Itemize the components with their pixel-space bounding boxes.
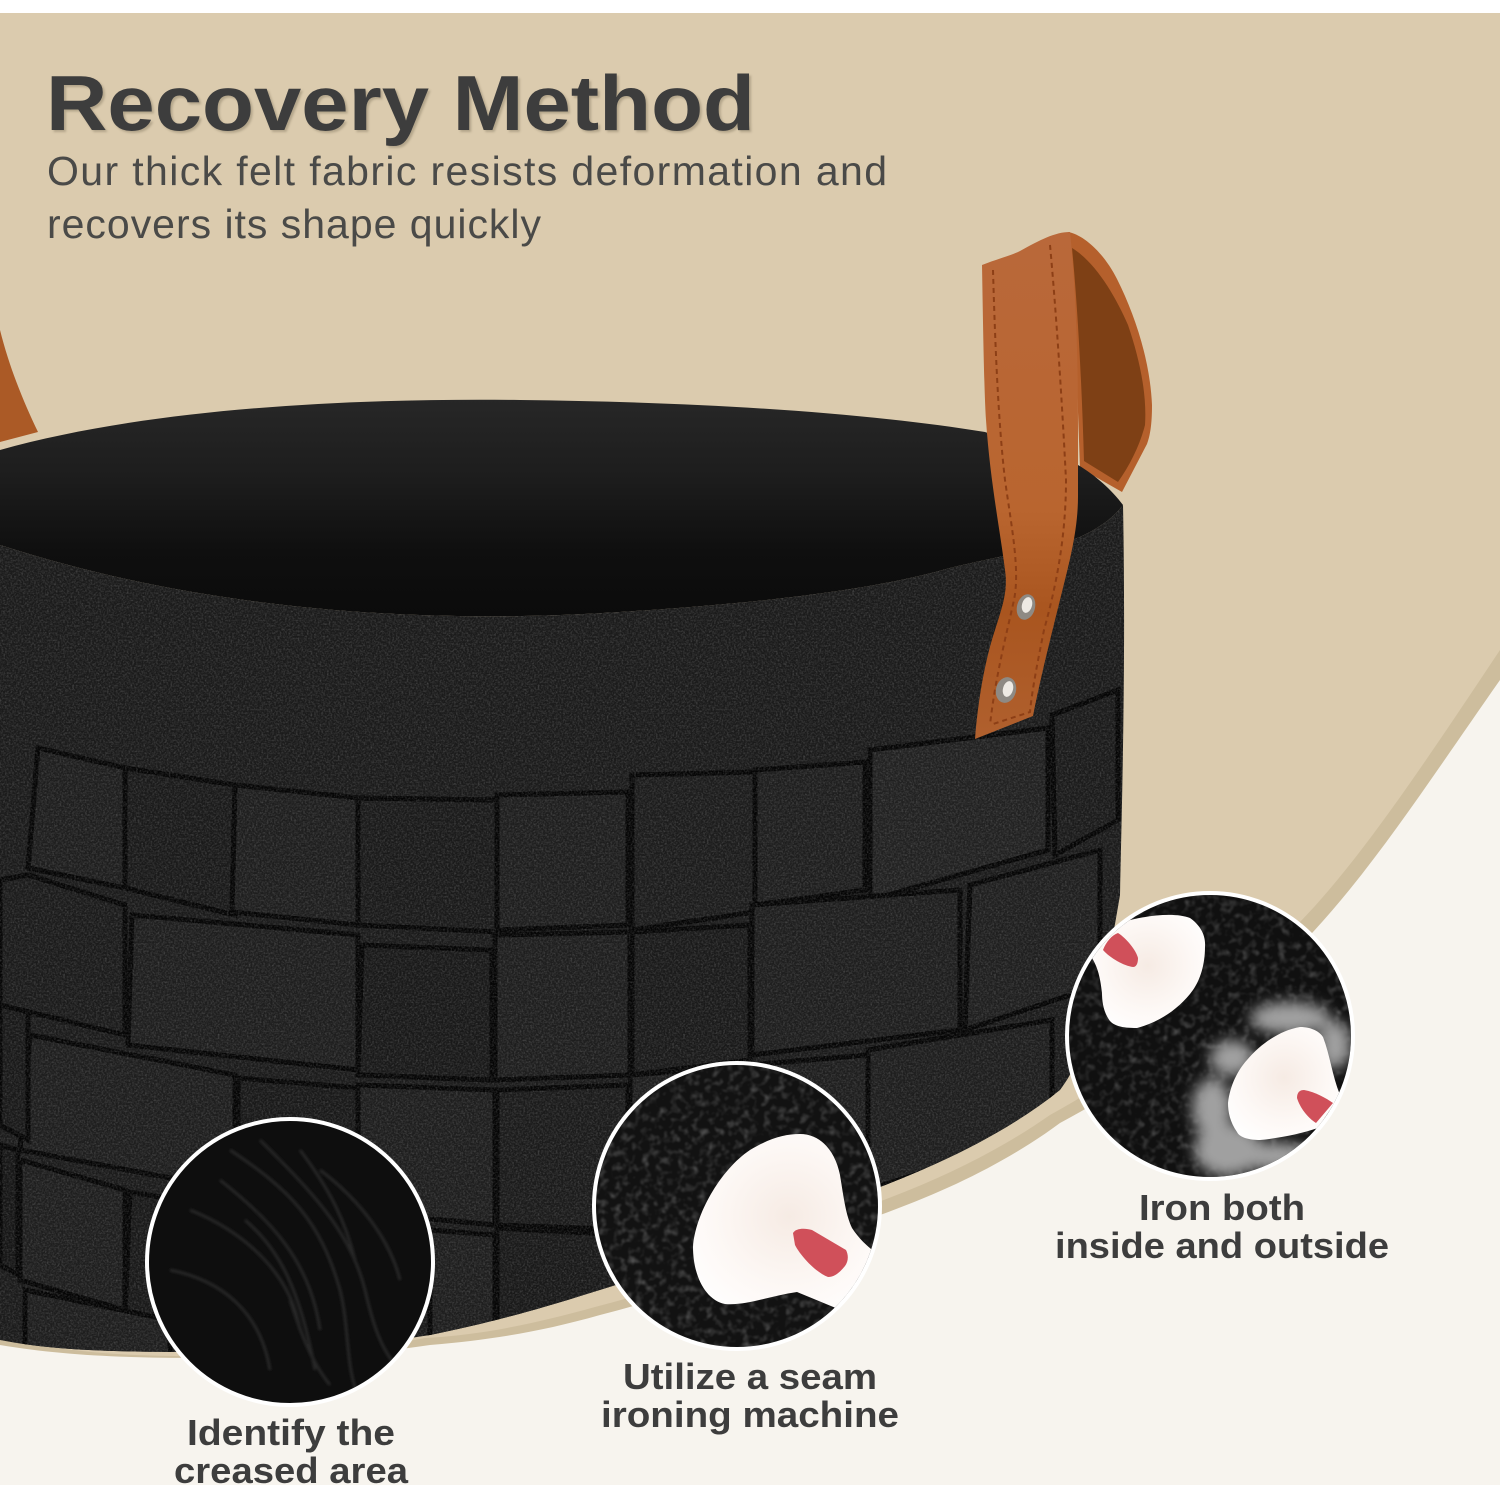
step 2: utilize a seam ironing machine xyxy=(590,1060,899,1435)
step 3: iron both inside and outside xyxy=(1055,890,1389,1266)
handle stitching xyxy=(990,245,1066,725)
circle photo: iron on felt xyxy=(590,1060,890,1360)
weave blocks xyxy=(0,690,1118,1360)
rivet bottom xyxy=(993,675,1019,705)
basket outer wall xyxy=(0,480,1130,1360)
basket interior xyxy=(0,400,1123,616)
caption xyxy=(174,1412,409,1491)
circle photo: irons and steam xyxy=(1060,890,1360,1190)
subtitle xyxy=(47,148,887,247)
right handle back xyxy=(1068,232,1152,492)
caption: Identify the xyxy=(187,1412,395,1453)
subtitle: recovers its shape quickly xyxy=(47,201,542,247)
title: Recovery Method xyxy=(46,59,755,147)
step 1: identify the creased area xyxy=(147,1119,433,1491)
caption xyxy=(1055,1187,1389,1266)
subtitle: Our thick felt fabric resists deformation and xyxy=(47,148,887,194)
caption: Iron both xyxy=(1139,1187,1305,1228)
felt basket with leather handles xyxy=(0,232,1152,1360)
caption: creased area xyxy=(174,1450,409,1491)
caption: ironing machine xyxy=(601,1394,899,1435)
rivet top xyxy=(1014,592,1038,622)
caption: inside and outside xyxy=(1055,1225,1389,1266)
caption xyxy=(601,1356,899,1435)
felt texture xyxy=(0,480,1130,1360)
caption: Utilize a seam xyxy=(623,1356,877,1397)
left handle xyxy=(0,330,38,442)
right handle front xyxy=(975,232,1078,739)
background: darker beige band xyxy=(0,650,1500,1400)
background: cream curved area xyxy=(0,680,1500,1485)
circle photo: creased felt xyxy=(147,1119,433,1405)
